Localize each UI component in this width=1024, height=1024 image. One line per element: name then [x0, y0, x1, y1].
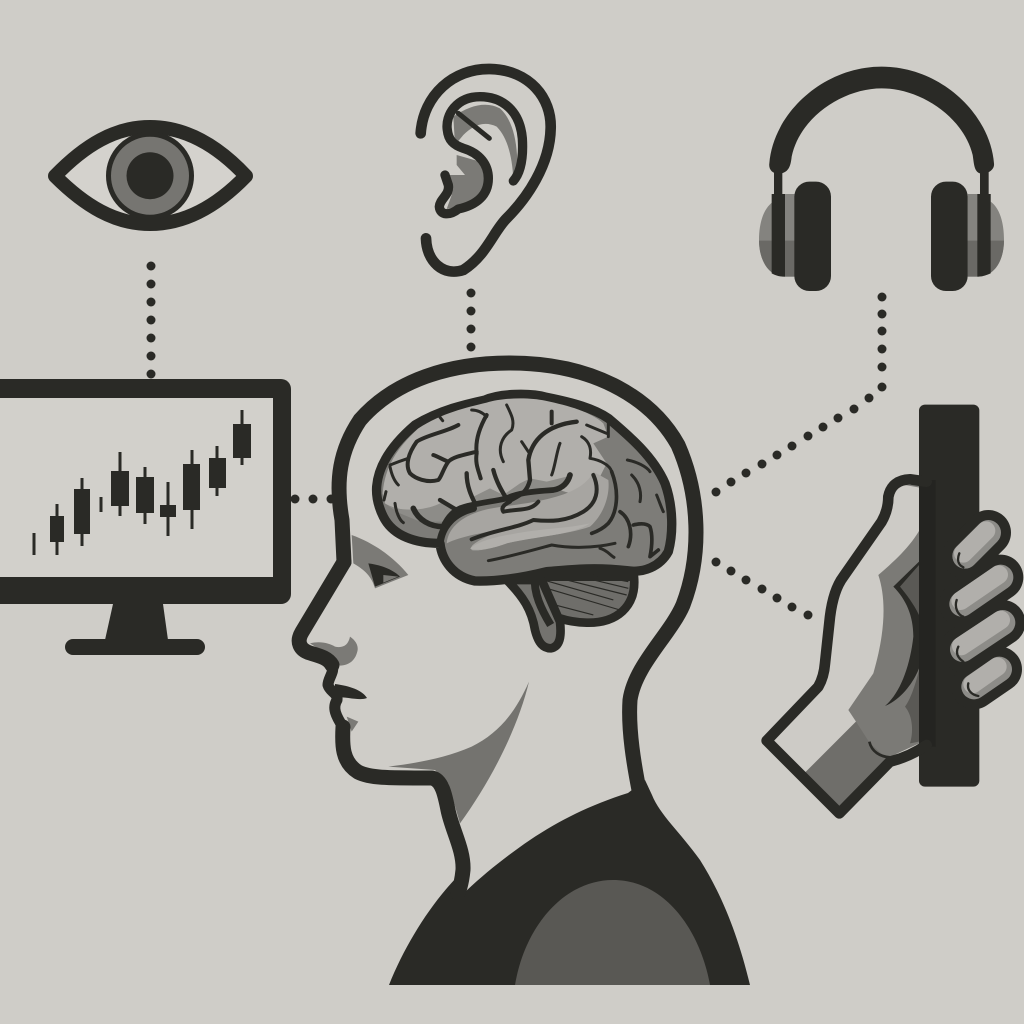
candlestick chart	[32, 410, 251, 555]
vertical bar	[919, 405, 979, 787]
brain	[377, 394, 672, 648]
sulci	[384, 405, 663, 561]
dotted connectors	[146, 262, 886, 620]
headband	[769, 67, 994, 174]
cerebellum	[531, 575, 634, 623]
ear cups	[794, 182, 968, 291]
head profile outline	[299, 363, 696, 893]
left ear pad	[759, 194, 795, 277]
right ear pad	[968, 194, 1004, 277]
body and shoulders	[389, 780, 750, 985]
hand holding bar	[767, 405, 1003, 813]
neck shadow	[388, 682, 529, 823]
lower lip shadow	[347, 717, 358, 732]
eye slit	[368, 563, 400, 587]
cerebrum silhouette	[377, 394, 672, 581]
fingers	[956, 531, 1003, 696]
brain stem	[507, 580, 561, 648]
icon: eye	[55, 127, 246, 224]
temporal highlight	[447, 472, 609, 550]
icon: headphones	[759, 67, 1004, 291]
palm and wrist	[767, 479, 936, 813]
light gyri	[383, 398, 608, 512]
upper lip spur	[335, 684, 367, 699]
shaded lobe folds	[387, 477, 567, 522]
face shading	[310, 535, 529, 823]
icon: ear	[421, 69, 551, 272]
brow shadow	[352, 535, 408, 588]
nose shadow	[310, 637, 358, 666]
monitor with candlestick chart	[0, 379, 291, 655]
